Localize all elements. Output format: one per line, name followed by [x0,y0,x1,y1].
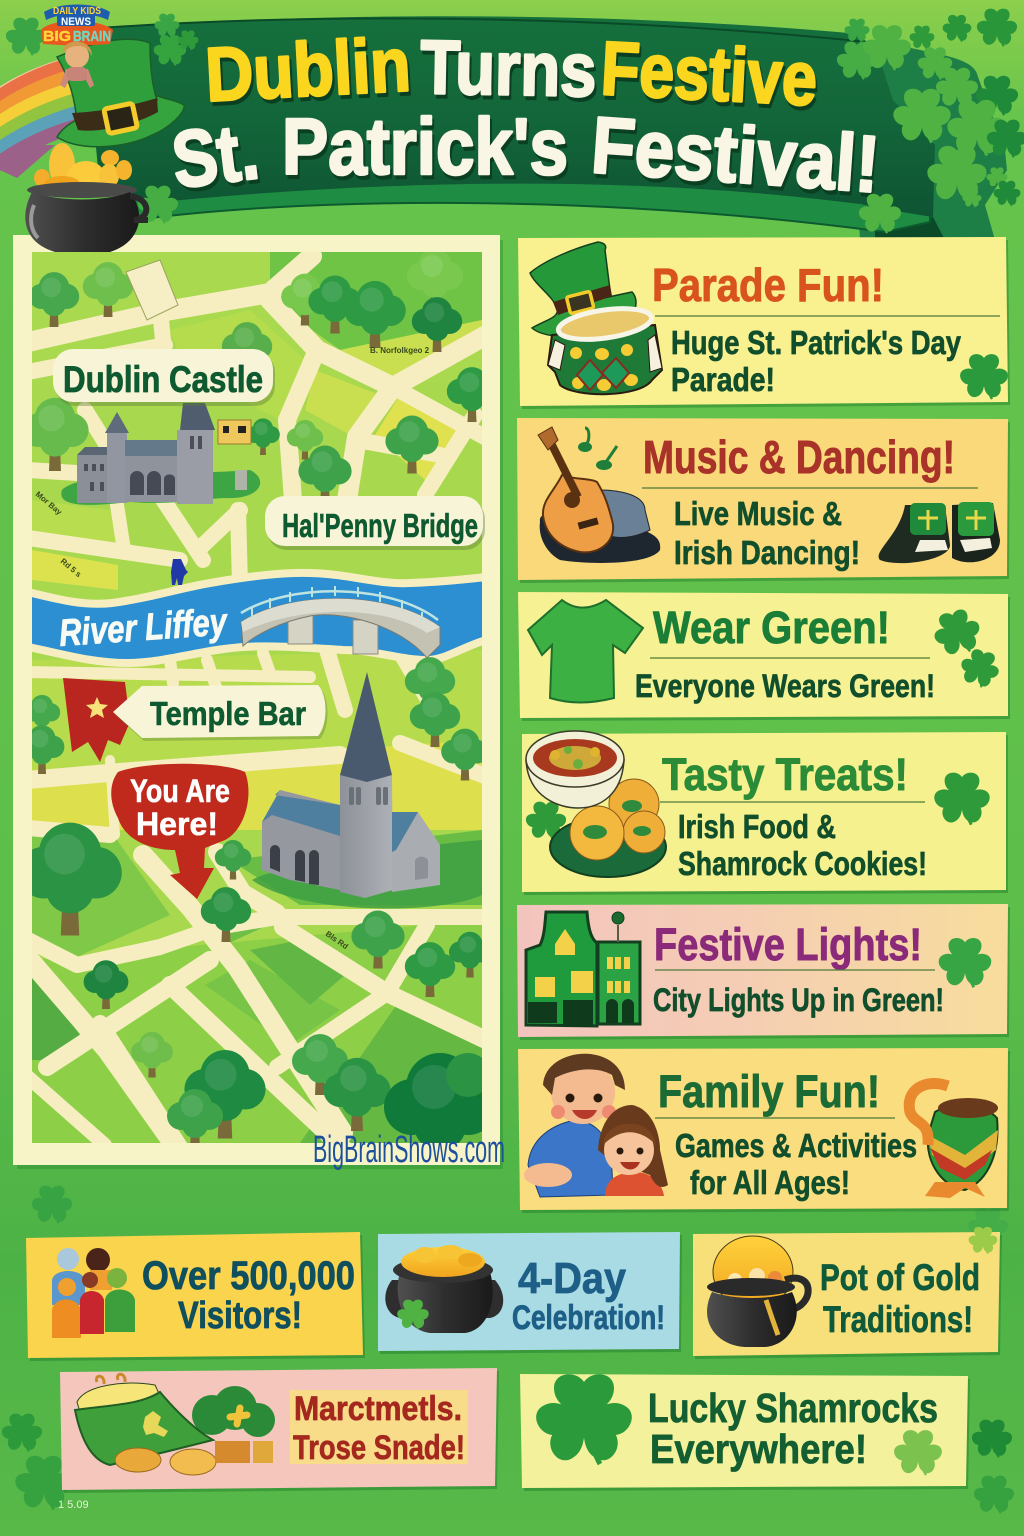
stat text: 4-Day [518,1254,626,1303]
description [671,324,962,398]
icon: Ha'Penny Bridge [241,586,440,658]
stat text [820,1257,980,1340]
icon: hat and drum [530,242,662,394]
small figure [171,559,188,585]
description: City Lights Up in Green! [653,982,944,1018]
description: Everyone Wears Green! [635,668,935,704]
title line two: Festival! [591,104,884,213]
title line two [167,100,884,213]
icon: green buildings [526,912,640,1027]
icon: striped vase with snake [909,1084,998,1198]
map roads [28,256,490,1150]
stat text: Over 500,000 [142,1254,355,1298]
title line one: Festive [601,30,821,126]
icon: boy and girl [524,1054,668,1197]
label: Temple Bar [113,685,328,741]
panel: Pot of Gold Traditions [693,1227,1002,1359]
logo: Daily Kids News Big Brain: DAILY KIDS [53,6,101,17]
stat text: Marctmetls. [294,1390,462,1428]
label: Dublin Castle: Dublin Castle [63,359,263,400]
icon: red ribbon flag [63,678,130,762]
description: Games & Activities [675,1127,917,1164]
stat text: Celebration! [512,1299,665,1337]
stat text: Pot of Gold [820,1257,980,1298]
callout: You Are Here: You Are [130,773,230,809]
title line two: Patrick's [284,106,570,195]
heading: Tasty Treats! [662,749,908,800]
description: Irish Dancing! [674,534,860,571]
description: Shamrock Cookies! [678,845,927,882]
small map notes: Rd 5 s [59,557,83,579]
icon: soup and cookies [524,731,666,877]
stat text [142,1254,355,1337]
title text [167,22,884,213]
stat text: Lucky Shamrocks [648,1385,938,1431]
watermark: BigBrainShows.com [313,1129,505,1171]
label: Dublin Castle [53,349,275,406]
icon: rainbow [0,56,80,178]
heading: Parade Fun! [652,259,884,311]
title line one: Turns [422,29,599,117]
small map notes: B. Norfolkgeo 2 [370,346,430,355]
title line one: Festive [599,26,819,122]
description [678,808,927,882]
stat text [512,1254,665,1337]
panel: Parade Fun [518,237,1010,409]
panel: Wear Green [518,592,1010,721]
callout: You Are Here: Here! [136,806,218,842]
icon: mascot [60,42,94,88]
description [675,1127,917,1201]
banner clovers [136,9,1024,234]
title line two: Festival! [589,100,882,209]
label: River Liffey: River Liffey [58,601,230,655]
river liffey [28,573,486,663]
panel: Lucky Shamrocks [520,1374,970,1491]
label: Temple Bar: Temple Bar [150,695,306,732]
icon: pot of gold [25,143,148,252]
icon: large shamrock [531,1374,637,1465]
heading: Festive Lights! [654,919,922,970]
logo: Daily Kids News Big Brain: BIG [43,28,71,45]
small map notes: Mor Bay [34,490,64,517]
panel: Festive Lights [517,904,1010,1040]
icon: t-shirt [528,600,643,702]
icon: pot of gold [385,1245,503,1333]
logo: Daily Kids News Big Brain: NEWS [61,16,91,28]
stat text: Visitors! [178,1295,302,1337]
icon: shamrocks [927,605,1005,692]
icon: black pot with gold [707,1236,808,1347]
icon: shamrock [958,354,1010,400]
stat text: Traditions! [823,1299,973,1340]
label: Ha'Penny Bridge [265,496,485,550]
panel: Tasty Treats [522,731,1008,895]
icon: Dublin Castle [61,403,260,505]
icon: guitar and case [538,427,660,563]
description [674,495,860,571]
label: Ha'Penny Bridge: Hal'Penny Bridge [282,507,478,544]
description: Live Music & [674,495,842,532]
panel: city map [13,235,503,1175]
logo: Daily Kids News Big Brain [41,4,113,46]
stat text [648,1385,938,1472]
title line two: St. [167,106,263,205]
description: Irish Food & [678,808,836,845]
title banner [85,16,1007,240]
callout: You Are Here [111,764,248,899]
panel: Family Fun [518,1048,1010,1213]
logo: Daily Kids News Big Brain: BRAIN [73,28,111,45]
icon: leprechaun hat [57,39,184,147]
description: Parade! [671,361,775,398]
map trees [18,249,497,1175]
stat text: Trose Snade! [293,1429,465,1467]
icon: shamrock [936,938,994,988]
description: Huge St. Patrick's Day [671,324,962,361]
icon: corner shamrock [967,1227,999,1254]
heading: Music & Dancing! [643,431,955,483]
stat text: Everywhere! [650,1426,867,1472]
title line one: Dublin [206,26,415,122]
title line two: St. [170,110,266,209]
panel: Music & Dancing [517,418,1010,583]
small print: 1 5.09 [58,1499,89,1511]
small map notes [34,260,430,951]
panel: Over 500,000 Visitors [26,1232,365,1361]
description: for All Ages! [690,1164,850,1201]
icon: dancing shoes [879,502,1000,563]
heading: Family Fun! [658,1066,880,1117]
icon: church [252,672,482,909]
icon: shamrock [931,773,993,825]
title line two: Patrick's [282,102,568,191]
panel: 4-Day Celebration [378,1232,682,1354]
title line one [203,22,821,126]
title line one: Turns [420,25,597,113]
panel: Marctmetls [60,1368,499,1493]
title line one: Dublin [203,22,413,118]
icon: small shamrock [892,1430,944,1476]
heading: Wear Green! [653,602,890,653]
icon: crowd [52,1248,135,1338]
stat text [293,1390,465,1467]
icon: market goods [75,1374,275,1475]
small map notes: Bls Rd [324,929,350,951]
map block colours [32,252,482,1143]
